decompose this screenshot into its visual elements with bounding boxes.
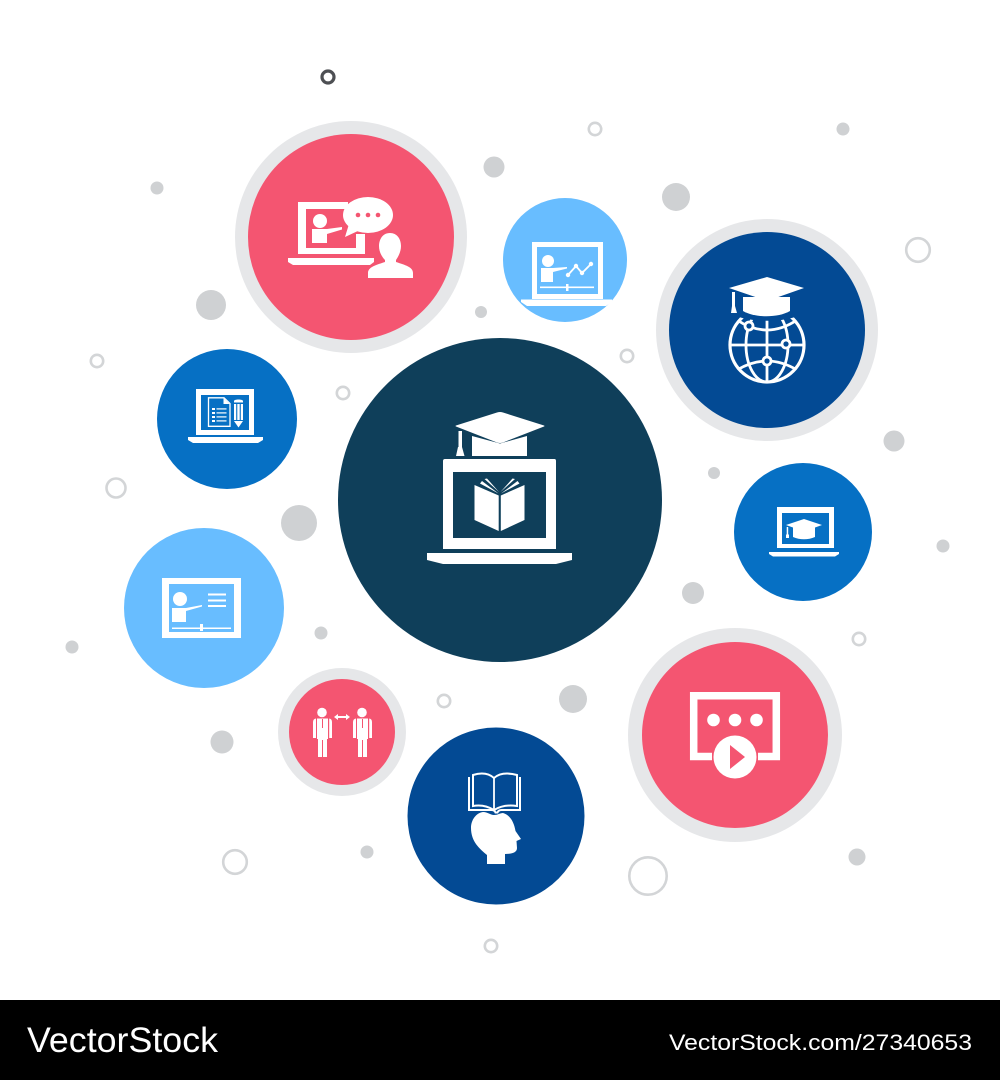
icon: presentation board <box>162 578 241 638</box>
bubble: teacher at board with notes <box>124 528 284 688</box>
icon: test on laptop <box>188 389 263 443</box>
central bubble: online education <box>338 338 662 662</box>
bubble: two people with arrow <box>278 668 406 796</box>
bubble: laptop with document and pencil <box>157 349 297 489</box>
bubble: teacher with speech bubble and student <box>235 121 467 353</box>
icon: graduation cap on globe <box>728 277 806 385</box>
icon: board with trend line <box>521 242 612 306</box>
icon: video lesson <box>694 696 776 778</box>
footer image id: VectorStock.com/27340653 <box>669 1030 972 1055</box>
icon: laptop, book and graduation cap <box>427 412 572 564</box>
bubble: head with open book <box>408 728 584 904</box>
icon: online lesson laptop with chat <box>288 197 413 278</box>
icon: knowledge head <box>469 774 521 864</box>
bubble: global education <box>656 219 878 441</box>
footer bar <box>0 1000 1000 1080</box>
bubble: laptop with graduation cap <box>734 463 872 601</box>
decorative scattered dots <box>66 71 950 952</box>
icon: e-learning laptop <box>769 507 839 556</box>
icon: two businessmen <box>313 708 372 757</box>
footer brand: VectorStock <box>27 1021 219 1060</box>
bubble: video player <box>628 628 842 842</box>
bubble: presentation with chart <box>503 198 627 322</box>
